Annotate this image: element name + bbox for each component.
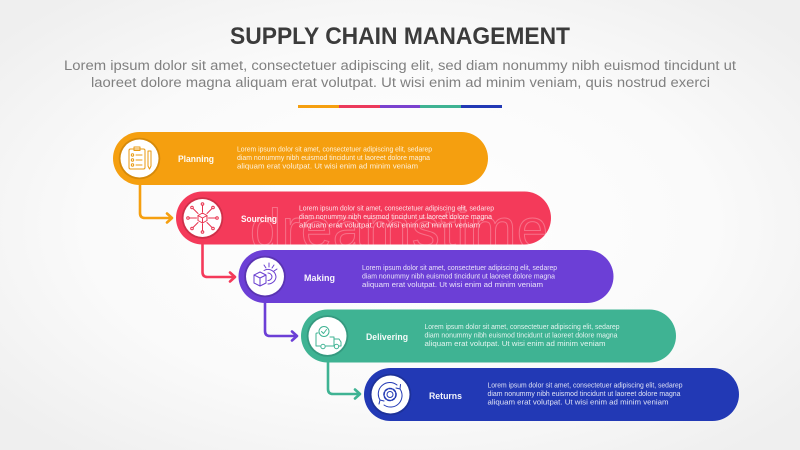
description: delivering: Lorem ipsum dolor sit amet, consectetuer adipiscing elit, sedarep — [424, 322, 620, 331]
label: making: Making — [304, 273, 335, 284]
description: planning: aliquam erat volutpat. Ut wisi enim ad minim veniam — [237, 162, 418, 170]
panel: sourcing — [176, 192, 551, 244]
description: making: aliquam erat volutpat. Ut wisi enim ad minim veniam — [362, 280, 543, 289]
label: returns: Returns — [429, 391, 462, 402]
label: sourcing: Sourcing — [241, 214, 277, 225]
description: delivering — [424, 322, 620, 348]
description: making: Lorem ipsum dolor sit amet, consectetuer adipiscing elit, sedarep — [362, 263, 557, 272]
description: returns: aliquam erat volutpat. Ut wisi enim ad minim veniam — [488, 398, 668, 406]
arrow: sourcing to making — [202, 242, 235, 282]
subtitle text block: laoreet dolore magna aliquam erat volutpat. Ut wisi enim ad minim veniam, quis nostrud exerci — [91, 75, 710, 90]
description: planning: diam nonummy nibh euismod tincidunt ut laoreet dolore magna — [237, 153, 431, 162]
icon: delivery truck — [316, 326, 341, 349]
description: returns — [488, 380, 682, 406]
description: sourcing: Lorem ipsum dolor sit amet, consectetuer adipiscing elit, sedarep — [299, 204, 494, 212]
description: making — [362, 263, 557, 289]
icon: network cube — [187, 203, 218, 233]
panel: delivering — [301, 310, 676, 362]
arrow: planning to sourcing — [140, 183, 172, 222]
description: making: diam nonummy nibh euismod tincidunt ut laoreet dolore magna — [362, 272, 556, 280]
description: sourcing: aliquam erat volutpat. Ut wisi enim ad minim veniam — [299, 220, 480, 230]
icon: box and gear — [254, 263, 277, 286]
description: planning — [237, 144, 432, 170]
label: delivering: Delivering — [366, 332, 408, 343]
icon: clipboard checklist — [129, 147, 151, 169]
description: delivering: diam nonummy nibh euismod tincidunt ut laoreet dolore magna — [424, 330, 618, 340]
watermark: dreamstime — [250, 197, 548, 260]
multicolour divider bar — [298, 105, 502, 108]
description: returns: diam nonummy nibh euismod tincidunt ut laoreet dolore magna — [488, 389, 681, 398]
icon: gear with return arrows — [378, 382, 402, 407]
description: sourcing — [299, 204, 494, 230]
description: returns: Lorem ipsum dolor sit amet, consectetuer adipiscing elit, sedarep — [488, 380, 682, 390]
description: sourcing: diam nonummy nibh euismod tincidunt ut laoreet dolore magna — [299, 212, 493, 221]
description: delivering: aliquam erat volutpat. Ut wisi enim ad minim veniam — [424, 339, 606, 348]
panel: making — [238, 250, 614, 303]
subtitle text block: Lorem ipsum dolor sit amet, consectetuer adipiscing elit, sed diam nonummy nibh euismod tincidunt ut — [64, 58, 736, 73]
arrow: delivering to returns — [328, 360, 360, 398]
arrow: making to delivering — [265, 301, 297, 340]
label: planning: Planning — [178, 154, 214, 165]
title: SUPPLY CHAIN MANAGEMENT — [230, 23, 570, 50]
subtitle text block — [64, 58, 736, 90]
description: planning: Lorem ipsum dolor sit amet, consectetuer adipiscing elit, sedarep — [237, 144, 432, 154]
panel: returns — [364, 368, 739, 421]
panel: planning — [113, 132, 488, 185]
